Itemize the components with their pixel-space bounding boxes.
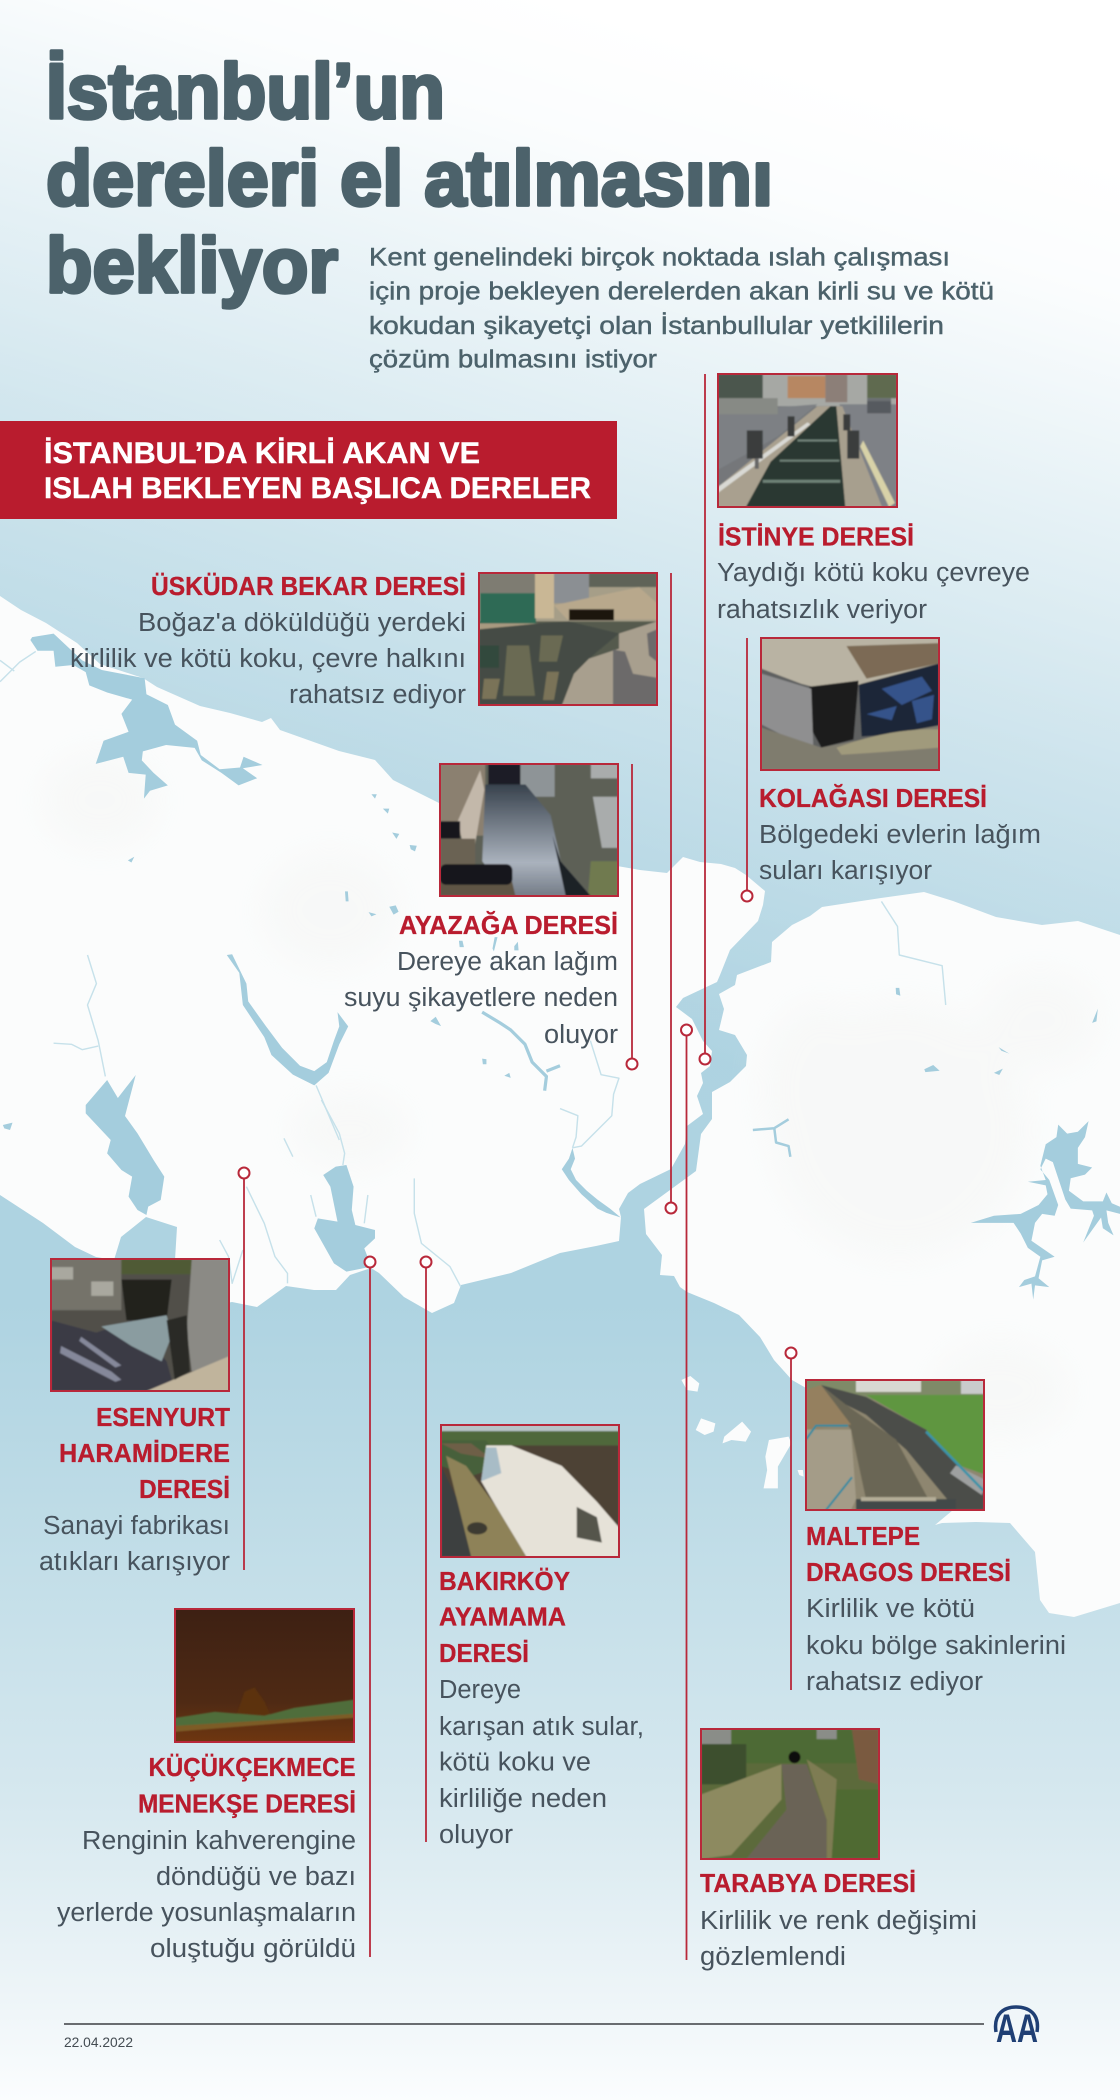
heading: Küçükçekmece: MENEKŞE DERESİ — [138, 1788, 356, 1818]
leader line: Küçükçekmece — [364, 1256, 376, 1957]
description: İstinye — [717, 559, 1030, 624]
heading: Esenyurt: DERESİ — [139, 1474, 230, 1504]
photo: Bakırköy — [441, 1425, 619, 1557]
panel: Küçükçekmece Menekşe Deresi — [57, 1256, 376, 1963]
description: Bakırköy: kötü koku ve — [439, 1748, 591, 1776]
map: land relief patches — [40, 750, 1100, 1440]
description: Tarabya — [700, 1907, 977, 1971]
description: Bakırköy: Dereye — [439, 1676, 521, 1704]
leader line: Kolağası — [742, 638, 752, 902]
map: islands — [681, 1376, 804, 1488]
photo: Kolağası — [761, 638, 939, 770]
red banner heading: ISLAH BEKLEYEN BAŞLICA DERELER — [44, 472, 591, 505]
map of Istanbul — [0, 596, 1120, 1617]
heading: Maltepe: MALTEPE — [806, 1521, 920, 1551]
panel: Esenyurt Haramidere Deresi — [39, 1168, 250, 1576]
description: Küçükçekmece: Renginin kahverengine — [82, 1827, 356, 1855]
leader line: Maltepe — [786, 1348, 796, 1690]
panel: Tarabya Deresi — [681, 1024, 977, 1971]
leader line: Esenyurt — [238, 1168, 250, 1570]
photo: Ayazağa — [440, 764, 618, 896]
photo: Maltepe — [806, 1380, 984, 1510]
description: İstinye: Yaydığı kötü koku çevreye — [717, 559, 1030, 587]
leader line: İstinye — [700, 374, 710, 1064]
heading: İstinye: İSTİNYE DERESİ — [718, 522, 914, 552]
heading: Ayazağa: AYAZAĞA DERESİ — [399, 910, 618, 940]
heading: Esenyurt — [59, 1402, 230, 1504]
panel: Kolağası Deresi — [742, 638, 1041, 902]
leader line: Tarabya — [681, 1024, 692, 1960]
panel: Bakırköy Ayamama Deresi — [420, 1256, 644, 1849]
photo: Tarabya — [701, 1729, 879, 1859]
leader line: Ayazağa — [626, 764, 638, 1070]
red banner heading — [0, 421, 617, 519]
heading: Küçükçekmece: KÜÇÜKÇEKMECE — [148, 1752, 356, 1782]
description: Esenyurt: Sanayi fabrikası — [43, 1512, 230, 1540]
red banner heading: İSTANBUL’DA KİRLİ AKAN VE — [44, 437, 480, 470]
main title: İstanbul’un — [46, 47, 445, 135]
photo: Esenyurt — [51, 1259, 229, 1391]
description: Tarabya: gözlemlendi — [700, 1943, 846, 1971]
panel: Üsküdar Bekar Deresi — [70, 571, 676, 1214]
description: Ayazağa — [344, 948, 619, 1049]
intro text: Kent genelindeki birçok noktada ıslah çalışması — [369, 244, 950, 272]
description: Bakırköy: karışan atık sular, — [439, 1713, 644, 1741]
photo: İstinye — [718, 374, 897, 507]
footer date: 22.04.2022 — [64, 2034, 133, 2050]
description: Maltepe: Kirlilik ve kötü — [806, 1595, 975, 1623]
heading: Tarabya: TARABYA DERESİ — [700, 1868, 916, 1898]
icon: AA logo: AA — [996, 2007, 1038, 2051]
description: Küçükçekmece: yerlerde yosunlaşmaların — [57, 1899, 356, 1927]
main title: bekliyor — [46, 221, 338, 309]
description: Esenyurt — [39, 1512, 231, 1576]
description: Bakırköy: oluyor — [439, 1821, 514, 1849]
description: Küçükçekmece — [57, 1827, 356, 1963]
description: Bakırköy: kirliliğe neden — [439, 1785, 607, 1813]
map: eastern lakes, golden horn and streams — [560, 901, 1120, 1300]
description: Maltepe: koku bölge sakinlerini — [806, 1632, 1066, 1660]
intro text: için proje bekleyen derelerden akan kirli su ve kötü — [369, 278, 994, 306]
photo: Küçükçekmece — [175, 1609, 354, 1742]
heading: Bakırköy: BAKIRKÖY — [439, 1566, 570, 1596]
description: Ayazağa: Dereye akan lağım — [397, 948, 618, 976]
description: Üsküdar — [70, 609, 467, 709]
map: asian side land — [644, 892, 1120, 1617]
heading: Maltepe: DRAGOS DERESİ — [806, 1557, 1011, 1587]
photo: Üsküdar — [479, 573, 657, 705]
panel: Maltepe Dragos Deresi — [786, 1348, 1066, 1696]
intro text: kokudan şikayetçi olan İstanbullular yetkililerin — [369, 311, 944, 340]
leader line: Üsküdar — [666, 573, 676, 1214]
description: Esenyurt: atıkları karışıyor — [39, 1548, 231, 1576]
description: Üsküdar: Boğaz'a döküldüğü yerdeki — [138, 609, 466, 637]
description: İstinye: rahatsızlık veriyor — [717, 596, 928, 624]
footer rule — [64, 2023, 984, 2025]
panel: İstinye Deresi — [700, 374, 1030, 1064]
leader line: Bakırköy — [420, 1256, 432, 1842]
heading: Bakırköy — [439, 1566, 570, 1668]
heading: Maltepe — [806, 1521, 1011, 1587]
heading: Küçükçekmece — [138, 1752, 356, 1818]
heading: Esenyurt: ESENYURT — [96, 1402, 230, 1432]
description: Kolağası: Bölgedeki evlerin lağım — [759, 821, 1041, 849]
description: Ayazağa: oluyor — [544, 1021, 619, 1049]
map: western lakes and streams — [0, 634, 560, 1140]
main title: dereleri el atılmasını — [46, 134, 773, 222]
intro text: çözüm bulmasını istiyor — [369, 346, 657, 374]
map: european side land — [0, 596, 765, 1313]
heading: Kolağası: KOLAĞASI DERESİ — [759, 783, 987, 813]
heading: Bakırköy: DERESİ — [439, 1638, 529, 1668]
description: Bakırköy — [439, 1676, 644, 1849]
description: Kolağası: suları karışıyor — [759, 857, 933, 885]
panel: Ayazağa Deresi — [344, 764, 638, 1070]
description: Tarabya: Kirlilik ve renk değişimi — [700, 1907, 977, 1935]
description: Üsküdar: kirlilik ve kötü koku, çevre halkını — [70, 645, 466, 673]
heading: Bakırköy: AYAMAMA — [439, 1602, 566, 1632]
intro text — [369, 244, 994, 374]
description: Küçükçekmece: döndüğü ve bazı — [156, 1863, 356, 1891]
heading: Esenyurt: HARAMİDERE — [59, 1438, 230, 1468]
map: büyükçekmece and küçükçekmece lakes — [3, 1075, 461, 1287]
description: Ayazağa: suyu şikayetlere neden — [344, 984, 618, 1012]
description: Küçükçekmece: oluştuğu görüldü — [150, 1935, 356, 1963]
heading: Üsküdar: ÜSKÜDAR BEKAR DERESİ — [151, 571, 466, 601]
description: Maltepe: rahatsız ediyor — [806, 1668, 984, 1696]
main title — [46, 47, 773, 309]
description: Üsküdar: rahatsız ediyor — [289, 681, 467, 709]
description: Maltepe — [806, 1595, 1066, 1696]
description: Kolağası — [759, 821, 1041, 885]
